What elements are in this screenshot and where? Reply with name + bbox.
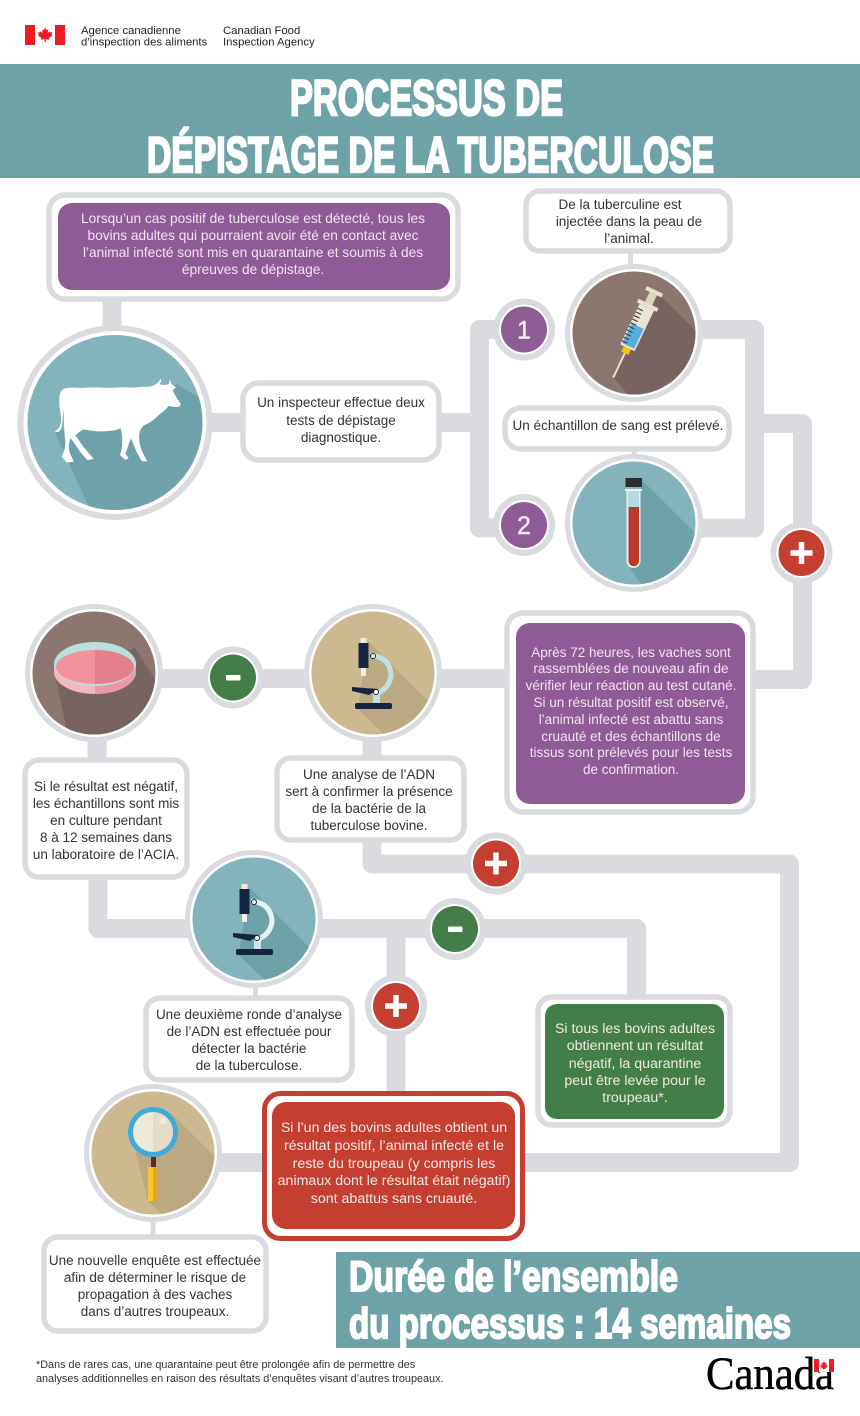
badge: step 2 (496, 497, 552, 553)
text panel: new investigation: dans d’autres troupeaux. (81, 1304, 229, 1319)
duration banner: Durée de l’ensemble (349, 1253, 678, 1301)
text panel: culture: 8 à 12 semaines dans (40, 830, 172, 845)
badge: negative second round (427, 901, 483, 957)
badge: positive DNA result (468, 836, 524, 892)
text panel: culture (25, 760, 187, 877)
badge: positive result to skin test (774, 525, 830, 581)
text panel: negative outcome, quarantine lifted: troupeau*. (602, 1090, 668, 1106)
text panel: DNA analysis: tuberculose bovine. (310, 818, 428, 833)
text panel: syringe instruction: l’animal. (604, 231, 654, 246)
text panel: after 72 hours: vérifier leur réaction au test cutané. (526, 678, 736, 693)
icon: cow (18, 325, 212, 520)
text panel: second DNA analysis: de la tuberculose. (196, 1058, 302, 1073)
text panel: after 72 hours: tissus sont prélevés pour les tests (530, 745, 733, 760)
text panel: after 72 hours: Si un résultat positif est observé, (533, 695, 729, 710)
duration banner (336, 1252, 860, 1348)
text panel: positive outcome, herd depopulated: reste du troupeau (y compris les (293, 1156, 495, 1172)
logo: Canadian Food Inspection Agency signature: Canadian Food (223, 25, 300, 37)
footnote: *Dans de rares cas, une quarantaine peut être prolongée afin de permettre des (36, 1359, 416, 1371)
flow connectors (97, 250, 802, 1238)
icon: magnifying glass (84, 1084, 222, 1222)
badge: negative result (205, 650, 261, 706)
text panel: culture: Si le résultat est négatif, (34, 779, 178, 794)
text panel: after 72 hours: rassemblées de nouveau afin de (533, 661, 729, 676)
icon: microscope (tan) (304, 604, 442, 742)
logo: Canadian Food Inspection Agency signature (25, 25, 315, 48)
icon: blood test tube (565, 454, 703, 592)
text panel: second DNA analysis: détecter la bactérie (192, 1041, 306, 1056)
text panel: second DNA analysis: de l’ADN est effectuée pour (167, 1024, 332, 1039)
footnote: analyses additionnelles en raison des résultats d’enquêtes visant d’autres troupeaux. (36, 1373, 444, 1385)
text panel: negative outcome, quarantine lifted: peut être levée pour le (564, 1073, 706, 1089)
text panel: positive case quarantine: Lorsqu’un cas positif de tuberculose est détecté, tous les (81, 211, 425, 226)
text panel: positive case quarantine: bovins adultes qui pourraient avoir été en contact avec (88, 228, 419, 243)
text panel: two diagnostic tests (243, 383, 439, 460)
badge: positive second round (368, 978, 424, 1034)
text panel: new investigation: afin de déterminer le risque de (64, 1270, 246, 1285)
text panel: DNA analysis (277, 758, 464, 840)
badge: step 2: 2 (517, 512, 531, 540)
text panel: culture: un laboratoire de l’ACIA. (33, 847, 179, 862)
text panel: after 72 hours: de confirmation. (583, 762, 679, 777)
text panel: syringe instruction (526, 191, 730, 251)
text panel: syringe instruction: injectée dans la peau de (556, 214, 702, 229)
title banner (0, 64, 860, 183)
text panel: second DNA analysis: Une deuxième ronde d’analyse (156, 1007, 342, 1022)
text panel: negative outcome, quarantine lifted: Si tous les bovins adultes (555, 1021, 715, 1037)
logo: Canadian Food Inspection Agency signature: d’inspection des aliments (81, 36, 208, 48)
text panel: two diagnostic tests: diagnostique. (301, 430, 381, 445)
logo: Canada wordmark: Canada (706, 1348, 834, 1400)
badge: step 1 (496, 302, 552, 358)
text panel: positive outcome, herd depopulated (264, 1094, 522, 1238)
text panel: blood sample (505, 408, 729, 449)
text panel: culture: en culture pendant (50, 813, 162, 828)
text panel: after 72 hours (507, 613, 753, 812)
text panel: syringe instruction: De la tuberculine est (558, 197, 682, 212)
text panel: DNA analysis: sert à confirmer la présence (285, 784, 453, 799)
badge: step 1: 1 (517, 316, 531, 344)
text panel: after 72 hours: Après 72 heures, les vaches sont (531, 645, 731, 660)
text panel: DNA analysis: Une analyse de l’ADN (303, 767, 435, 782)
text panel: positive outcome, herd depopulated: sont abattus sans cruauté. (311, 1191, 477, 1207)
title banner: PROCESSUS DE (290, 70, 563, 126)
text panel: positive case quarantine: l’animal infecté sont mis en quarantaine et soumis à des (83, 245, 423, 260)
text panel: negative outcome, quarantine lifted: négatif, la quarantine (569, 1056, 701, 1072)
text panel: positive outcome, herd depopulated: animaux dont le résultat était négatif) (278, 1173, 510, 1189)
text panel: two diagnostic tests: tests de dépistage (286, 413, 396, 428)
text panel: DNA analysis: de la bactérie de la (312, 801, 427, 816)
text panel: two diagnostic tests: Un inspecteur effectue deux (257, 395, 425, 410)
icon: syringe (565, 264, 703, 402)
footnote (36, 1359, 444, 1385)
text panel: new investigation (44, 1237, 266, 1331)
text panel: second DNA analysis (146, 998, 352, 1080)
text panel: positive case quarantine (49, 195, 458, 299)
text panel: positive outcome, herd depopulated: Si l’un des bovins adultes obtient un (281, 1120, 507, 1136)
text panel: positive case quarantine: épreuves de dépistage. (182, 262, 324, 277)
logo: Canadian Food Inspection Agency signature: Agence canadienne (81, 25, 181, 37)
text panel: after 72 hours: cruauté et des échantillons de (541, 729, 721, 744)
text panel: negative outcome, quarantine lifted (538, 997, 730, 1125)
text panel: negative outcome, quarantine lifted: obtiennent un résultat (567, 1038, 703, 1054)
icon: microscope (teal) (185, 850, 323, 988)
icon: petri dish (28, 606, 165, 745)
logo: Canadian Food Inspection Agency signature: Inspection Agency (223, 36, 315, 48)
text panel: culture: les échantillons sont mis (33, 796, 179, 811)
text panel: blood sample: Un échantillon de sang est prélevé. (513, 418, 723, 433)
text panel: positive outcome, herd depopulated: résultat positif, l’animal infecté et le (284, 1138, 504, 1154)
text panel: new investigation: propagation à des vaches (78, 1287, 233, 1302)
text panel: new investigation: Une nouvelle enquête est effectuée (49, 1253, 261, 1268)
text panel: after 72 hours: l’animal infecté est abattu sans (539, 712, 724, 727)
